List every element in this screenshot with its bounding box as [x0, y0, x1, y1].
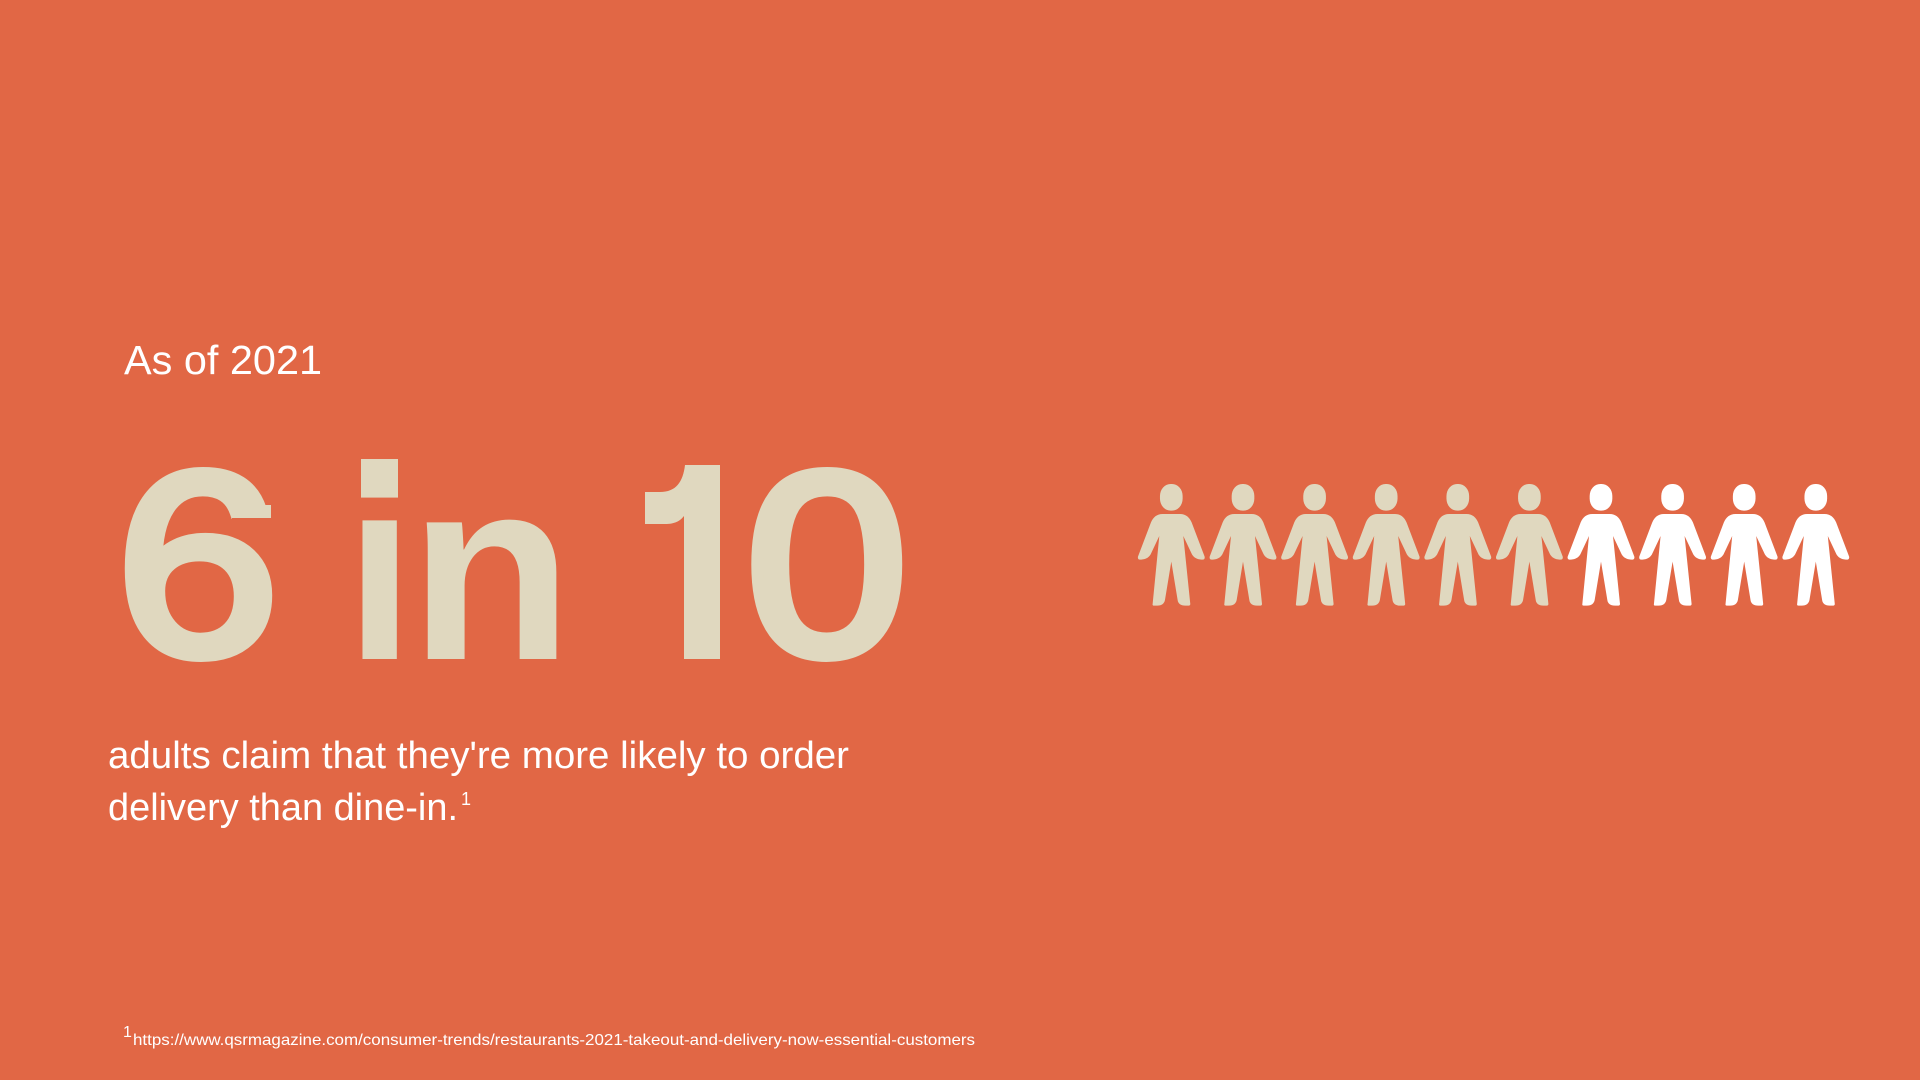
headline: 6 in 10 — [124, 459, 902, 662]
white people — [1568, 484, 1849, 606]
person 8 — [1639, 484, 1706, 606]
line 2: delivery than dine-in. — [108, 787, 458, 829]
person 6 — [1496, 484, 1563, 606]
person 10 — [1782, 484, 1849, 606]
text: As of 2021: As of 2021 — [124, 337, 322, 383]
person 5 — [1424, 484, 1491, 606]
person 2 — [1210, 484, 1276, 606]
letter i: i — [345, 423, 415, 715]
digit 1 — [645, 465, 720, 659]
person 1 — [1138, 484, 1205, 606]
letter n: n — [409, 424, 573, 714]
person 7 — [1568, 484, 1634, 606]
cream people — [1138, 484, 1563, 606]
pictogram: 6 of 10 people highlighted — [1138, 484, 1849, 606]
description text — [108, 735, 849, 829]
footnote marker: 1 — [461, 789, 471, 809]
digit 0: 0 — [746, 419, 908, 710]
digit 1: 1 — [620, 413, 771, 717]
line 1: adults claim that they're more likely to order — [108, 735, 849, 777]
person 9 — [1711, 484, 1778, 606]
footnote number: 1 — [123, 1024, 132, 1041]
person 3 — [1281, 484, 1348, 606]
source footnote — [123, 1024, 975, 1049]
footnote URL: https://www.qsrmagazine.com/consumer-trends/restaurants-2021-takeout-and-delivery-now-essential-customers — [133, 1032, 975, 1049]
digit 6: 6 — [116, 418, 279, 709]
person 4 — [1353, 484, 1420, 606]
